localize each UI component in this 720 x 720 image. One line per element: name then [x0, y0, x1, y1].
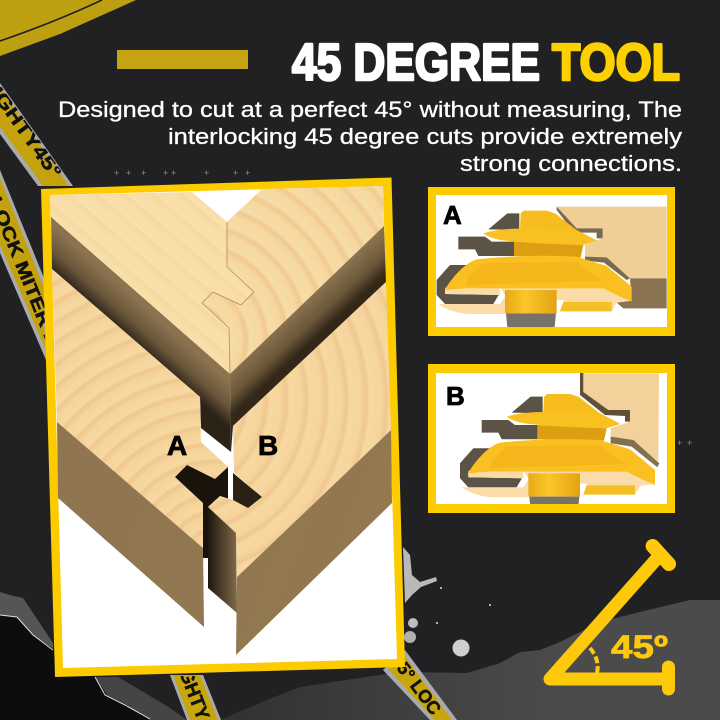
wood: upper left plank	[50, 192, 254, 374]
plus marks: +	[141, 168, 146, 178]
wood: lower right plank	[208, 282, 391, 577]
wood: lower left side	[57, 422, 204, 627]
dark band left	[51, 217, 231, 452]
yellow arc top left	[0, 0, 136, 56]
plus marks: +	[171, 168, 176, 178]
description text: strong connections.	[460, 151, 682, 176]
wood piece	[580, 373, 659, 467]
plus marks	[114, 168, 692, 448]
tape: lock miter	[0, 170, 46, 360]
title: 45 DEGREE	[292, 34, 540, 92]
tape: mighty45	[0, 83, 73, 186]
description text: interlocking 45 degree cuts provide extremely	[168, 124, 682, 149]
plus marks: +	[245, 168, 250, 178]
label B: B	[258, 430, 278, 461]
description text	[58, 97, 682, 176]
label A: A	[443, 200, 462, 230]
tape: bottom right: 5° LOC	[393, 658, 445, 719]
description text: Designed to cut at a perfect 45° without measuring, The	[58, 97, 682, 122]
panel: router bit B	[428, 364, 675, 513]
label B: B	[446, 381, 465, 411]
plus marks: +	[114, 168, 119, 178]
plus marks: +	[677, 438, 682, 448]
joint seam line	[202, 222, 254, 374]
right slot shadow	[233, 473, 262, 508]
accent bar	[117, 50, 248, 69]
panel: main joint diagram	[41, 178, 405, 677]
tape: bottom right	[383, 650, 457, 720]
label A: A	[167, 430, 187, 461]
plus marks: +	[204, 168, 209, 178]
plus marks: +	[126, 168, 131, 178]
title: TOOL	[552, 34, 680, 92]
wood: lower right side	[236, 430, 392, 655]
dark band right	[230, 226, 386, 452]
icon: 45 degree angle	[550, 546, 669, 689]
wood: upper right plank	[202, 186, 384, 374]
slot shadow	[175, 465, 228, 558]
tape: bottom left	[170, 675, 221, 720]
plus marks: +	[233, 168, 238, 178]
slot interior	[208, 507, 237, 613]
wood: lower left plank	[52, 269, 228, 548]
label 45 degrees: 45º	[611, 629, 668, 665]
panel: router bit A	[428, 187, 675, 336]
plus marks: +	[163, 168, 168, 178]
wood piece	[557, 207, 667, 308]
plus marks: +	[687, 438, 692, 448]
